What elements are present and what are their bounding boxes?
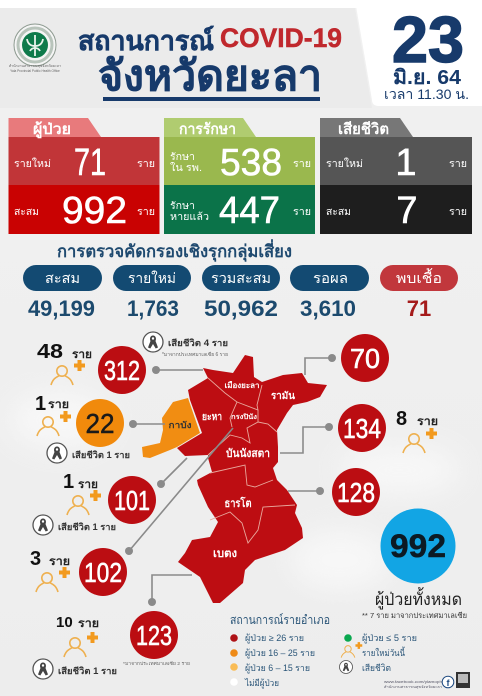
legend: ไม่มีผู้ป่วย: [244, 678, 279, 689]
district count: 312: [98, 346, 146, 394]
social footer: สำนักงานสาธารณสุขจังหวัดยะลา: [384, 685, 442, 690]
title: COVID-19: [220, 23, 342, 53]
panel: treatment: ใน รพ.: [170, 162, 202, 174]
screening stats: สะสม: [45, 270, 80, 286]
panel: deaths: 1: [395, 142, 417, 184]
map of Yala districts: รามัน: [271, 390, 295, 402]
legend: ผู้ป่วย 6 – 15 ราย: [245, 663, 310, 674]
panel: patients: รายใหม่: [14, 157, 51, 170]
new cases: 1 Kabang: 1: [35, 393, 46, 415]
panel: treatment: [164, 118, 315, 234]
panel: treatment: 447: [219, 190, 280, 232]
total cases circle: 992: [390, 528, 446, 564]
district count: 70: [341, 334, 389, 382]
legend: ผู้ป่วย 16 – 25 ราย: [245, 648, 315, 659]
panel: deaths: 7: [396, 190, 418, 232]
district count: 22: 22: [86, 408, 114, 439]
map of Yala districts: ธารโต: [224, 496, 252, 510]
screening stats: [23, 265, 458, 321]
panel: deaths: [320, 118, 472, 234]
district count: 22: [76, 399, 124, 447]
panel: patients: ราย: [137, 206, 155, 218]
deaths note: 4: เสียชีวิต 4 ราย: [168, 338, 228, 348]
logo: public health office: [9, 24, 61, 73]
panel: patients: 992: [62, 190, 127, 232]
panel: treatment: รักษา: [170, 152, 195, 163]
new cases: 48: 48: [37, 341, 63, 363]
social footer: f: [446, 678, 450, 688]
map of Yala districts: กรงปินัง: [231, 413, 258, 421]
deaths note: 101 district: [33, 515, 116, 535]
panel: treatment: 538: [220, 142, 282, 184]
new cases: 1 Kabang: [35, 393, 71, 436]
panel: treatment: รักษา: [170, 201, 195, 212]
panel: patients: ผู้ป่วย: [33, 121, 71, 139]
new cases: 1: ราย: [78, 479, 98, 491]
legend: ผู้ป่วย ≥ 26 ราย: [245, 633, 304, 644]
district count: 102: 102: [84, 557, 122, 588]
screening stats: 71: [407, 296, 431, 321]
title: จังหวัดยะลา: [98, 52, 322, 99]
legend: สถานการณ์รายอำเภอ: [230, 613, 330, 627]
screening stats: 50,962: [204, 296, 278, 321]
district count: 101: [108, 476, 156, 524]
district count: 134: 134: [343, 413, 381, 444]
map of Yala districts: เมืองยะลา: [224, 380, 260, 390]
new cases: 1: [63, 471, 101, 515]
new cases: 48: [37, 341, 92, 385]
legend: รายใหม่วันนี้: [362, 646, 406, 658]
legend: [230, 613, 417, 689]
deaths note: Kabang: [47, 443, 130, 463]
panel: patients: ราย: [137, 158, 155, 170]
screening stats: พบเชื้อ: [396, 268, 442, 286]
district count: 70: 70: [350, 343, 380, 374]
total cases caption: [362, 587, 467, 620]
district count: 102: [79, 548, 127, 596]
panel: patients: 71: [74, 142, 106, 184]
panel: deaths: ราย: [449, 158, 467, 170]
panel: treatment: ราย: [293, 158, 311, 170]
social footer: www.facebook.com/ylamoph: [384, 680, 442, 684]
new cases: 10: ราย: [78, 618, 99, 630]
panel: deaths: รายใหม่: [326, 157, 363, 170]
total cases caption: ** 7 ราย มาจากประเทศมาเลเซีย: [362, 611, 467, 620]
panel: treatment: หายแล้ว: [170, 211, 209, 223]
connector lines: [125, 354, 336, 606]
deaths note: Kabang: เสียชีวิต 1 ราย: [72, 450, 130, 460]
new cases: 8: 8: [396, 408, 407, 430]
new cases: 1: 1: [63, 471, 74, 493]
deaths note: 4: *มาจากประเทศมาเลเซีย 6 ราย: [162, 351, 228, 358]
social footer: [384, 672, 470, 690]
new cases: 10: 10: [56, 614, 73, 631]
panel: treatment: ราย: [293, 206, 311, 218]
footnote: 123 district: *มาจากประเทศมาเลเซีย 2 ราย: [123, 661, 190, 666]
total cases caption: ผู้ป่วยทั้งหมด: [375, 587, 462, 610]
new cases: 8: [396, 408, 438, 453]
soft background texture: [10, 392, 460, 590]
screening stats: รอผล: [313, 270, 348, 286]
screening stats: รวมสะสม: [211, 270, 271, 286]
legend: ผู้ป่วย ≤ 5 ราย: [362, 633, 417, 644]
map of Yala districts: ยะหา: [202, 412, 222, 423]
panel: patients: [8, 118, 160, 234]
map of Yala districts: เบตง: [213, 548, 237, 560]
new cases: 3: 3: [30, 548, 41, 570]
date: [384, 3, 469, 102]
new cases: 1 Kabang: ราย: [48, 399, 69, 411]
district count: 123: [130, 611, 178, 659]
map of Yala districts: [142, 355, 327, 603]
date: 23: [392, 3, 464, 76]
logo: public health office: Yala Provincial Public Health Office: [10, 69, 60, 73]
panel: deaths: สะสม: [326, 206, 351, 218]
panel: patients: สะสม: [14, 206, 39, 218]
district count: 128: 128: [337, 477, 375, 508]
district count: 134: [338, 404, 386, 452]
total cases circle: [380, 508, 456, 584]
district count: 312: 312: [104, 355, 140, 386]
new cases: 10: [56, 614, 99, 657]
map of Yala districts: กาบัง: [168, 420, 192, 430]
date: เวลา 11.30 น.: [384, 86, 469, 102]
screening stats: 49,199: [28, 296, 95, 321]
legend: เสียชีวิต: [362, 663, 391, 673]
deaths note: 123 district: เสียชีวิต 1 ราย: [58, 666, 117, 676]
screening stats: 1,763: [127, 296, 179, 321]
title: [78, 23, 342, 101]
date: มิ.ย. 64: [393, 67, 462, 89]
map of Yala districts: บันนังสตา: [226, 447, 270, 460]
screening stats: 3,610: [300, 296, 356, 321]
district count: 123: 123: [136, 620, 172, 651]
title: สถานการณ์: [78, 25, 214, 56]
district count: 101: 101: [114, 485, 150, 516]
logo: public health office: สำนักงานสาธารณสุขจังหวัดยะลา: [9, 64, 61, 69]
panel: treatment: การรักษา: [179, 121, 236, 138]
new cases: 8: ราย: [417, 416, 438, 428]
deaths note: 101 district: เสียชีวิต 1 ราย: [58, 522, 116, 532]
new cases: 3: [30, 548, 70, 592]
deaths note: 123 district: [33, 659, 117, 679]
panel: deaths: เสียชีวิต: [338, 120, 389, 138]
screening heading: การตรวจคัดกรองเชิงรุกกลุ่มเสี่ยง: [57, 239, 292, 262]
new cases: 48: ราย: [72, 349, 92, 361]
new cases: 3: ราย: [49, 556, 70, 568]
district count: 128: [332, 468, 380, 516]
deaths note: 4: [143, 332, 228, 358]
panel: deaths: ราย: [449, 206, 467, 218]
screening stats: รายใหม่: [128, 270, 176, 286]
header band: [0, 0, 482, 108]
